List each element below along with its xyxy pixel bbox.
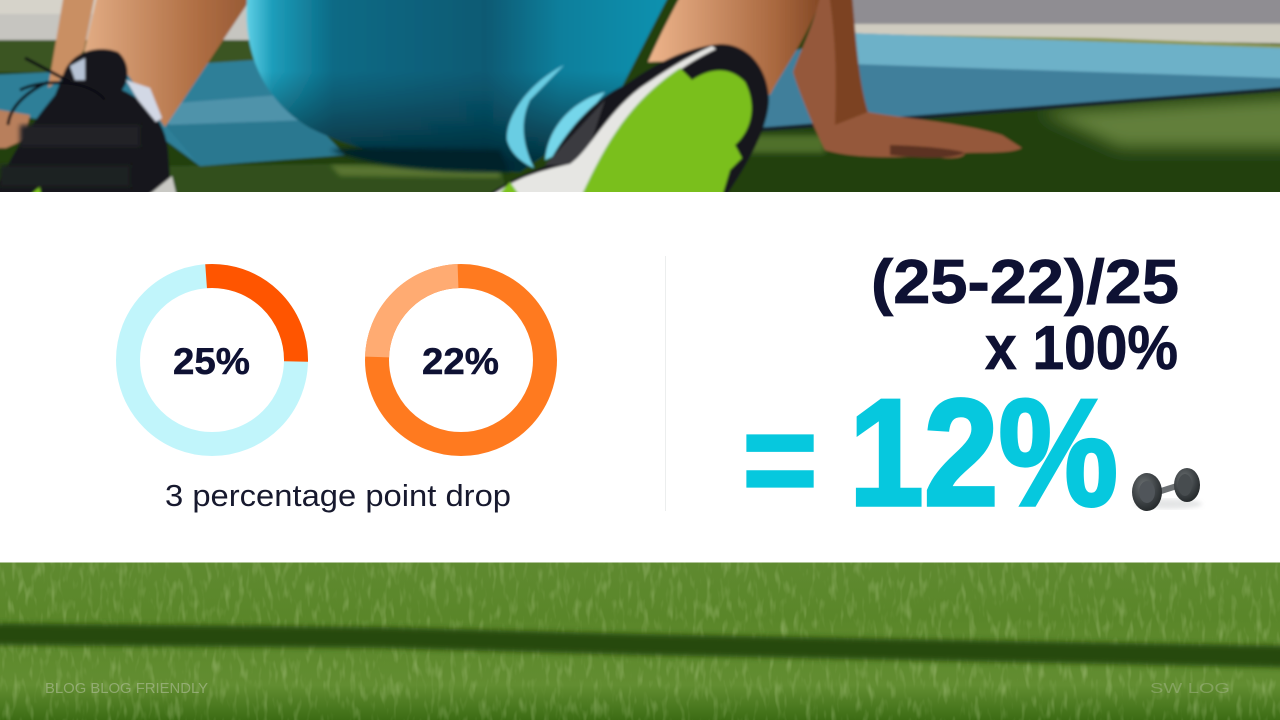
left shoe bbox=[0, 48, 178, 192]
yoga mat right bbox=[742, 33, 1280, 133]
donut chart: 22% bbox=[377, 276, 545, 444]
lighter arc bbox=[377, 276, 458, 357]
formula bbox=[871, 248, 1179, 383]
back arm left bbox=[48, 0, 100, 88]
near grass bbox=[170, 96, 1280, 210]
white content panel bbox=[0, 192, 1280, 562]
long shadow on grass bbox=[0, 623, 1280, 668]
footer watermark right: SW LOG bbox=[1150, 680, 1230, 697]
right shoe bbox=[492, 42, 770, 192]
grass blade texture bbox=[0, 562, 1280, 720]
far grass band bbox=[0, 40, 260, 72]
formula line 2: x 100% bbox=[985, 314, 1178, 383]
formula line 1: (25-22)/25 bbox=[871, 248, 1179, 317]
shorts bbox=[246, 0, 682, 172]
value label 22%: 22% bbox=[422, 341, 499, 382]
equals sign: = bbox=[742, 386, 818, 534]
result: = 12% bbox=[742, 368, 1118, 538]
icon: dumbbell bbox=[1132, 468, 1202, 511]
right leg bbox=[648, 0, 830, 95]
left leg bbox=[84, 0, 270, 127]
caption: 3 percentage point drop bbox=[165, 478, 511, 513]
bottom photo: grass field bbox=[0, 562, 1280, 720]
footer watermark left: BLOG BLOG FRIENDLY bbox=[45, 680, 208, 697]
pavement background bbox=[0, 0, 1280, 50]
value label 25%: 25% bbox=[173, 341, 250, 382]
top photo: person sitting on a yoga mat bbox=[0, 0, 1280, 210]
vertical divider bbox=[665, 256, 666, 511]
highlighted arc 25% bbox=[206, 276, 296, 362]
hand behind left shoe bbox=[0, 105, 30, 148]
result value: 12% bbox=[849, 368, 1118, 538]
yoga mat left bbox=[0, 60, 345, 166]
shorts highlight swooshes bbox=[507, 65, 605, 168]
right arm and hand bbox=[793, 0, 1022, 158]
donut chart: 25% bbox=[128, 276, 296, 444]
